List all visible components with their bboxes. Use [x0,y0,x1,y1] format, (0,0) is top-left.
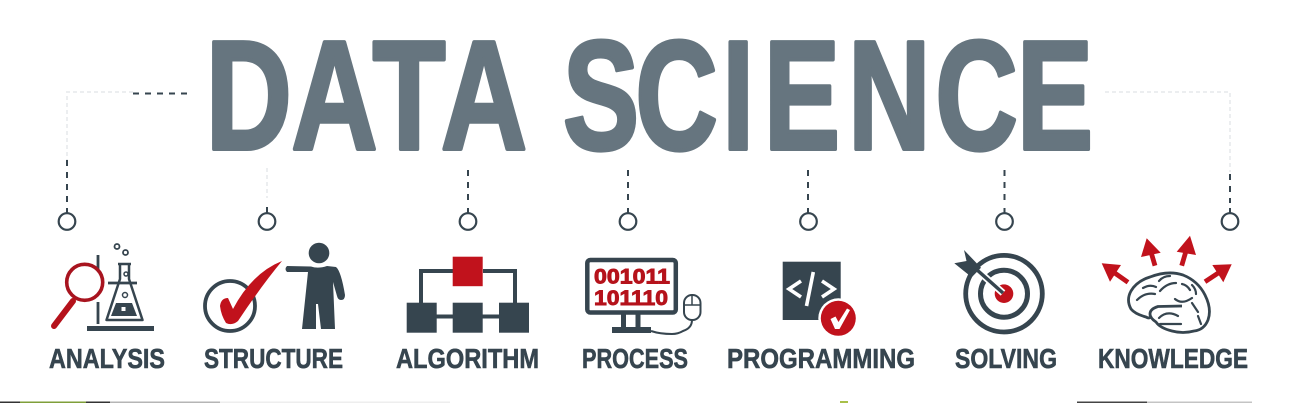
label: solving: SOLVING [955,343,1057,374]
label: algorithm: ALGORITHM [396,343,539,374]
label: process: PROCESS [582,343,688,374]
icon: magnifier and flask [54,244,154,331]
icon: algorithm flowchart [407,257,529,333]
label: structure: STRUCTURE [204,343,343,374]
label: analysis: ANALYSIS [49,343,165,374]
title: DATA [206,10,527,183]
label: knowledge: KNOWLEDGE [1098,343,1248,374]
icon: computer monitor with binary and mouse [587,260,700,334]
connector nodes [59,207,1238,230]
bottom edge strip [0,401,1252,403]
title: SCIENCE [563,9,1093,182]
icon: computer monitor with binary and mouse: 001011 [594,266,670,288]
icon: computer monitor with binary and mouse: 101110 [594,287,668,310]
icon: code window with check badge [783,262,858,338]
dashed connectors [67,92,1230,205]
title [206,9,1093,183]
label: programming: PROGRAMMING [727,343,915,374]
icon: brain with arrows [1102,236,1232,332]
icon: check mark and pointing person [205,243,345,331]
icon: target with arrow [954,250,1042,332]
